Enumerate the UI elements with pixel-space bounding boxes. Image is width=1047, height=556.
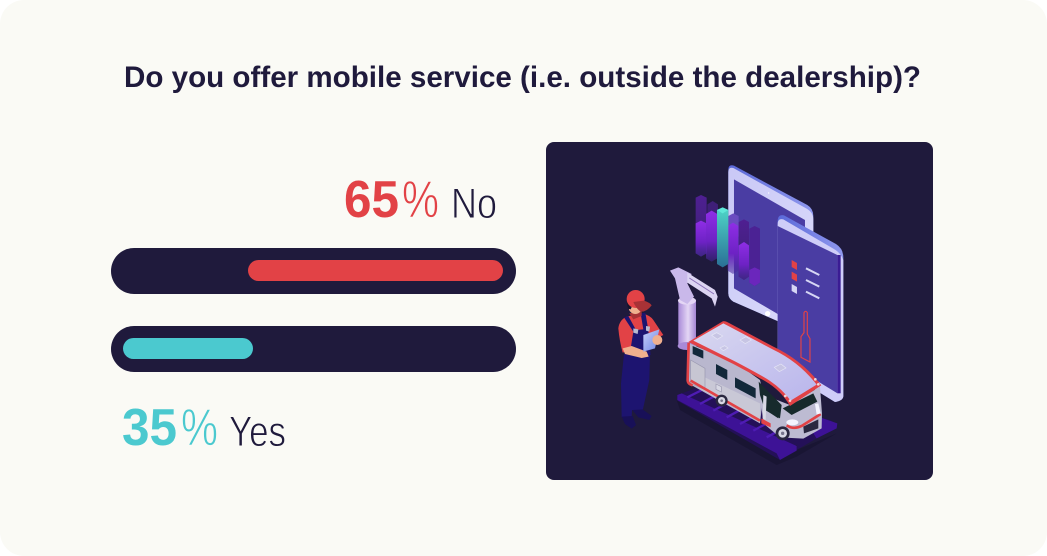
mechanic hand xyxy=(652,335,662,345)
mechanic boot right xyxy=(632,409,652,420)
label: 65% No: 65 xyxy=(344,171,399,229)
icon: platform xyxy=(677,387,837,465)
label: 35% Yes: % xyxy=(181,399,218,457)
panel: illustration xyxy=(546,142,933,480)
icon: front tablet xyxy=(778,215,843,402)
icon: mechanic xyxy=(618,290,663,429)
mechanic cap xyxy=(627,290,645,308)
mechanic boot left xyxy=(622,416,636,429)
label: 65% No: No xyxy=(451,180,497,228)
mechanic shirt xyxy=(618,313,663,353)
icon: motorhome body xyxy=(688,343,822,440)
label: 35% Yes: Yes xyxy=(229,408,286,456)
mechanic neck xyxy=(629,311,642,319)
icon: back tablet xyxy=(728,165,813,337)
mechanic forearm xyxy=(623,346,649,358)
icon: motorhome roof xyxy=(688,321,821,406)
icon: platform and motorhome xyxy=(677,321,837,465)
mechanic overalls bib xyxy=(624,313,651,355)
label: 65% No xyxy=(344,171,497,229)
chart: isometric bars xyxy=(696,195,760,286)
icon: robot arm column xyxy=(678,297,696,350)
label: 65% No: % xyxy=(402,171,439,229)
title: Do you offer mobile service (i.e. outside the dealership)? xyxy=(124,61,921,94)
label: 35% Yes: 35 xyxy=(122,399,177,457)
icon: robot arm head xyxy=(670,267,718,307)
label: 35% Yes xyxy=(122,399,286,457)
bar: No 65% xyxy=(111,248,516,294)
mechanic legs xyxy=(621,353,650,417)
mechanic face xyxy=(629,301,642,314)
clipboard xyxy=(643,329,659,352)
bar: Yes 35% xyxy=(111,326,516,372)
